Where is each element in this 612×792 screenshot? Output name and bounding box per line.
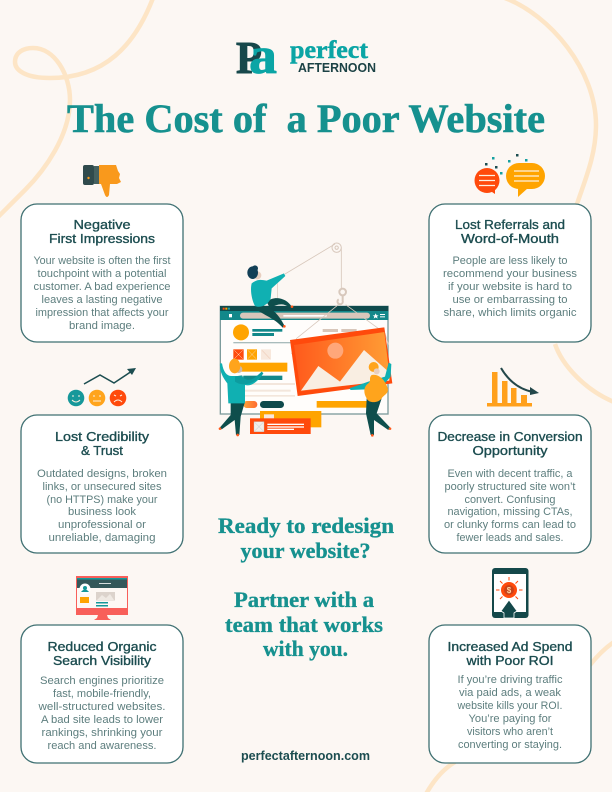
icon: monitor <box>76 576 128 620</box>
icon: tablet with dollar coin <box>492 568 528 618</box>
text: increased ad spend <box>456 674 563 751</box>
heading: lost credibility <box>55 429 150 458</box>
text: reduced organic: reach and awareness. <box>48 740 156 752</box>
heading: lost credibility: Lost Credibility <box>55 429 150 444</box>
illustration: team building a website <box>219 243 392 437</box>
person on top pulling rope <box>247 265 293 328</box>
text: negative first impressions: Your website is often the first <box>34 255 171 267</box>
call to action <box>218 513 394 661</box>
text: lost credibility: business look <box>68 506 137 518</box>
heading: decrease in conversion: Opportunity <box>472 443 548 458</box>
icon: thumbs down <box>83 165 121 197</box>
call to action: with you. <box>263 636 348 661</box>
text: lost credibility: unreliable, damaging <box>48 532 156 544</box>
person on left <box>219 359 263 436</box>
panel: lost credibility and trust <box>21 415 183 553</box>
panel: negative first impressions <box>21 204 183 342</box>
panel: reduced organic search visibility <box>21 625 183 763</box>
text: lost credibility: links, or unsecured sites <box>42 481 162 493</box>
icon: declining bar chart <box>487 368 539 406</box>
text: decrease in conversion: navigation, missing CTAs, <box>448 506 572 518</box>
website url: perfectafternoon.com <box>241 749 370 763</box>
text: increased ad spend: If you’re driving traffic <box>458 674 563 686</box>
panel: increased ad spend <box>429 625 591 763</box>
text: negative first impressions: impression that affects your <box>36 307 169 319</box>
text: increased ad spend: website kills your ROI. <box>456 700 562 712</box>
text: lost credibility: Outdated designs, broken <box>37 468 167 480</box>
logo: P <box>236 32 262 83</box>
text: reduced organic: Search engines prioritize <box>40 675 164 687</box>
text: lost referrals <box>443 255 577 319</box>
text: lost credibility: (no HTTPS) make your <box>46 494 158 506</box>
logo: AFTERNOON <box>298 60 376 75</box>
text: increased ad spend: via paid ads, a weak <box>459 687 562 699</box>
tilted image panel <box>290 327 392 396</box>
call to action: Ready to redesign <box>218 513 394 538</box>
text: lost credibility <box>37 468 167 544</box>
text: decrease in conversion: fewer leads and sales. <box>456 532 564 544</box>
heading: lost referrals: Lost Referrals and <box>455 217 565 232</box>
text: decrease in conversion: Even with decent traffic, a <box>448 468 573 480</box>
text: reduced organic: well-structured websites. <box>37 701 165 713</box>
text: increased ad spend: visitors who aren’t <box>467 726 553 738</box>
heading: reduced organic <box>48 639 157 668</box>
call to action: your website? <box>240 538 370 563</box>
pulley and ropes <box>277 243 389 354</box>
text: increased ad spend: converting or staying. <box>458 739 562 751</box>
text: reduced organic: rankings, shrinking your <box>42 727 163 739</box>
heading: negative first impressions: First Impressions <box>49 231 156 246</box>
text: negative first impressions <box>34 255 171 332</box>
text: negative first impressions: leaves a lasting negative <box>42 294 163 306</box>
heading: decrease in conversion <box>438 429 582 458</box>
panel: lost referrals and word-of-mouth <box>429 204 591 342</box>
text: reduced organic <box>37 675 165 752</box>
heading: negative first impressions <box>49 217 156 246</box>
logo: a <box>249 28 277 85</box>
text: lost referrals: People are less likely to <box>452 255 568 267</box>
heading: lost referrals <box>455 217 565 246</box>
heading: negative first impressions: Negative <box>74 217 130 232</box>
person on right <box>349 362 391 437</box>
icon: trend line and mood faces <box>68 368 136 406</box>
heading: reduced organic: Reduced Organic <box>48 639 157 654</box>
text: lost referrals: recommend your business <box>443 268 577 280</box>
text: lost referrals: if your website is hard to <box>448 281 572 293</box>
text: decrease in conversion <box>444 468 576 544</box>
heading: reduced organic: Search Visibility <box>53 653 152 668</box>
panel: decrease in conversion opportunity <box>429 415 591 553</box>
text: increased ad spend: You’re paying for <box>468 713 552 725</box>
browser window <box>220 306 388 414</box>
heading: lost credibility: & Trust <box>81 443 123 458</box>
heading: increased ad spend: with Poor ROI <box>465 653 554 668</box>
text: lost referrals: share, which limits organic <box>444 307 577 319</box>
title: The Cost of a Poor Website <box>67 96 545 141</box>
text: lost credibility: unprofessional or <box>58 519 146 531</box>
text: decrease in conversion: convert. Confusing <box>464 494 556 506</box>
text: reduced organic: A bad site leads to lower <box>41 714 163 726</box>
text: negative first impressions: brand image. <box>69 320 135 332</box>
logo: perfect <box>290 37 369 64</box>
text: lost referrals: use or embarrassing to <box>452 294 568 306</box>
logo <box>236 28 376 85</box>
small content cards <box>250 411 321 434</box>
icon: tablet with dollar coin: $ <box>507 586 512 595</box>
heading: increased ad spend <box>448 639 572 668</box>
call to action: team that works <box>225 612 383 637</box>
text: decrease in conversion: poorly structured site won’t <box>444 481 576 493</box>
text: negative first impressions: touchpoint with a potential <box>38 268 166 280</box>
heading: lost referrals: Word-of-Mouth <box>461 231 559 246</box>
icon: speech bubbles <box>474 154 545 197</box>
heading: decrease in conversion: Decrease in Conversion <box>438 429 582 444</box>
call to action: Partner with a <box>234 587 374 612</box>
heading: increased ad spend: Increased Ad Spend <box>448 639 572 654</box>
text: reduced organic: fast, mobile-friendly, <box>53 688 151 700</box>
text: decrease in conversion: or clunky forms can lead to <box>444 519 576 531</box>
text: negative first impressions: customer. A bad experience <box>34 281 171 293</box>
